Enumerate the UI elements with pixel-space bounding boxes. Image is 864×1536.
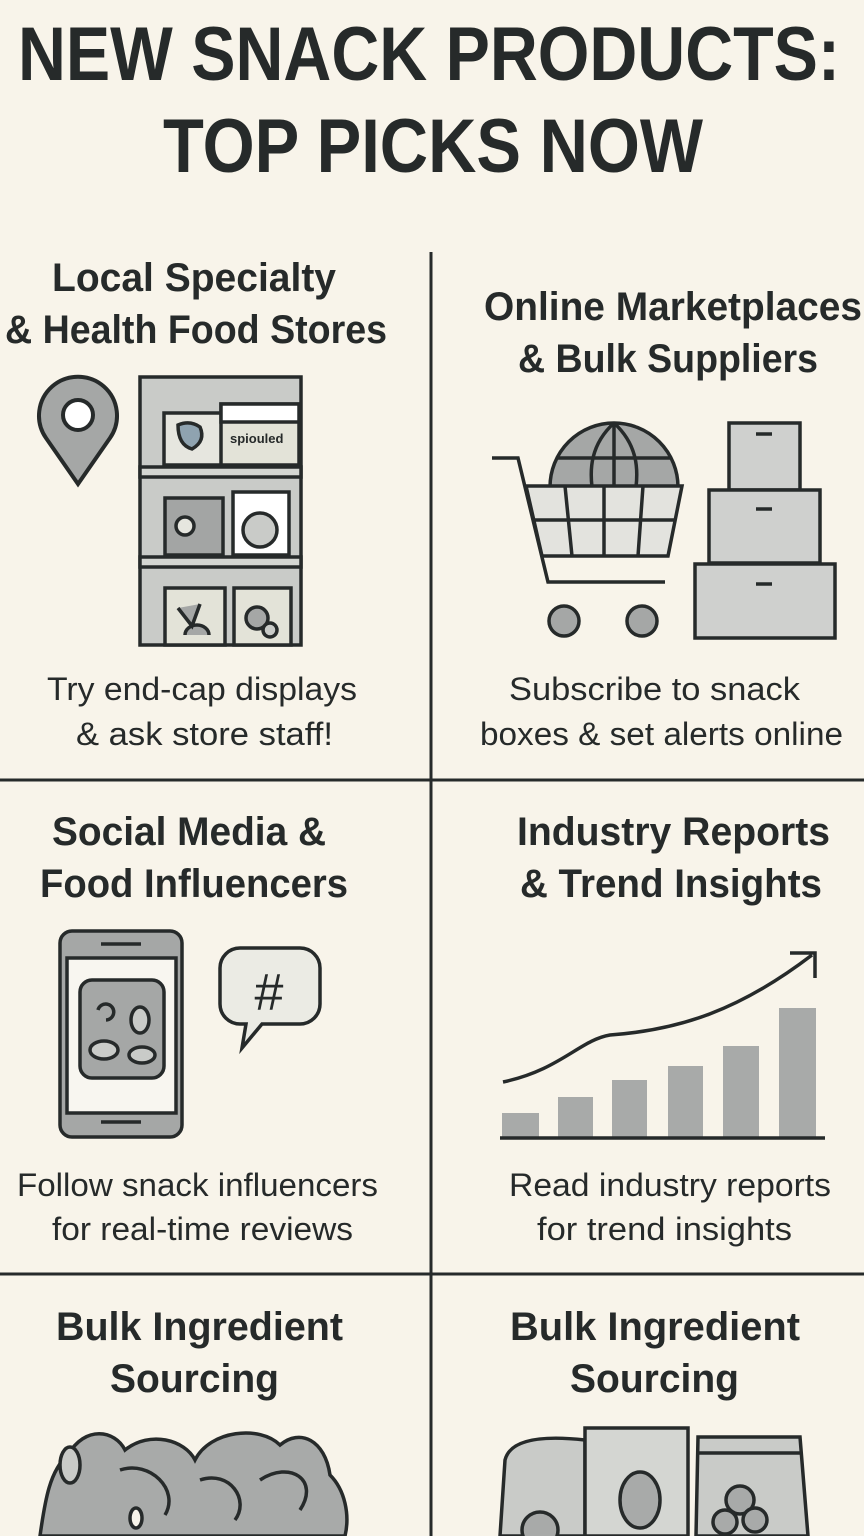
caption: social: Follow snack influencers [17, 1167, 378, 1203]
chart: rising bars [500, 953, 825, 1138]
icon: hashtag bubble [220, 948, 320, 1048]
caption: online: boxes & set alerts online [480, 716, 843, 752]
heading: online: & Bulk Suppliers [518, 337, 818, 381]
icon: stacked boxes [695, 423, 835, 638]
icon: globe in cart [492, 423, 682, 636]
heading: bulk right: Sourcing [570, 1357, 739, 1401]
arrow: trend line [503, 953, 815, 1082]
panel: bulk sourcing right [500, 1305, 808, 1536]
heading: bulk right: Bulk Ingredient [510, 1305, 800, 1349]
panel: local stores [5, 256, 387, 752]
caption: reports: Read industry reports [509, 1167, 831, 1203]
panel: social media [17, 810, 378, 1247]
heading: bulk left: Bulk Ingredient [56, 1305, 343, 1349]
title: TOP PICKS NOW [163, 104, 703, 189]
caption: local stores: Try end-cap displays [47, 671, 357, 707]
caption: social: for real-time reviews [52, 1211, 353, 1247]
caption: local stores [47, 671, 357, 752]
icon: store shelf: spiouled [230, 431, 284, 446]
heading: reports: & Trend Insights [520, 862, 822, 906]
heading: bulk left: Sourcing [110, 1357, 279, 1401]
icon: store shelf [140, 377, 301, 645]
panel: bulk sourcing left [40, 1305, 347, 1536]
caption: online: Subscribe to snack [509, 671, 801, 707]
heading: reports [517, 810, 830, 906]
heading: local stores [5, 256, 387, 352]
heading: bulk right [510, 1305, 800, 1401]
panel: online marketplaces [480, 285, 862, 752]
caption: online [480, 671, 843, 752]
heading: online: Online Marketplaces [484, 285, 862, 329]
icon: location pin [39, 377, 117, 484]
heading: local stores: Local Specialty [52, 256, 337, 300]
heading: local stores: & Health Food Stores [5, 308, 387, 352]
heading: reports: Industry Reports [517, 810, 830, 854]
heading: online [484, 285, 862, 381]
icon: hashtag bubble: # [255, 964, 284, 1022]
icon: phone [60, 931, 182, 1137]
panel: industry reports [500, 810, 831, 1247]
caption: reports: for trend insights [537, 1211, 792, 1247]
icon: snack bags [500, 1428, 808, 1536]
caption: local stores: & ask store staff! [76, 716, 333, 752]
caption: reports [509, 1167, 831, 1247]
heading: bulk left [56, 1305, 343, 1401]
title [18, 12, 840, 189]
caption: social [17, 1167, 378, 1247]
icon: snack pile [40, 1433, 347, 1536]
heading: social: Social Media & [52, 810, 326, 854]
heading: social [40, 810, 348, 906]
heading: social: Food Influencers [40, 862, 348, 906]
